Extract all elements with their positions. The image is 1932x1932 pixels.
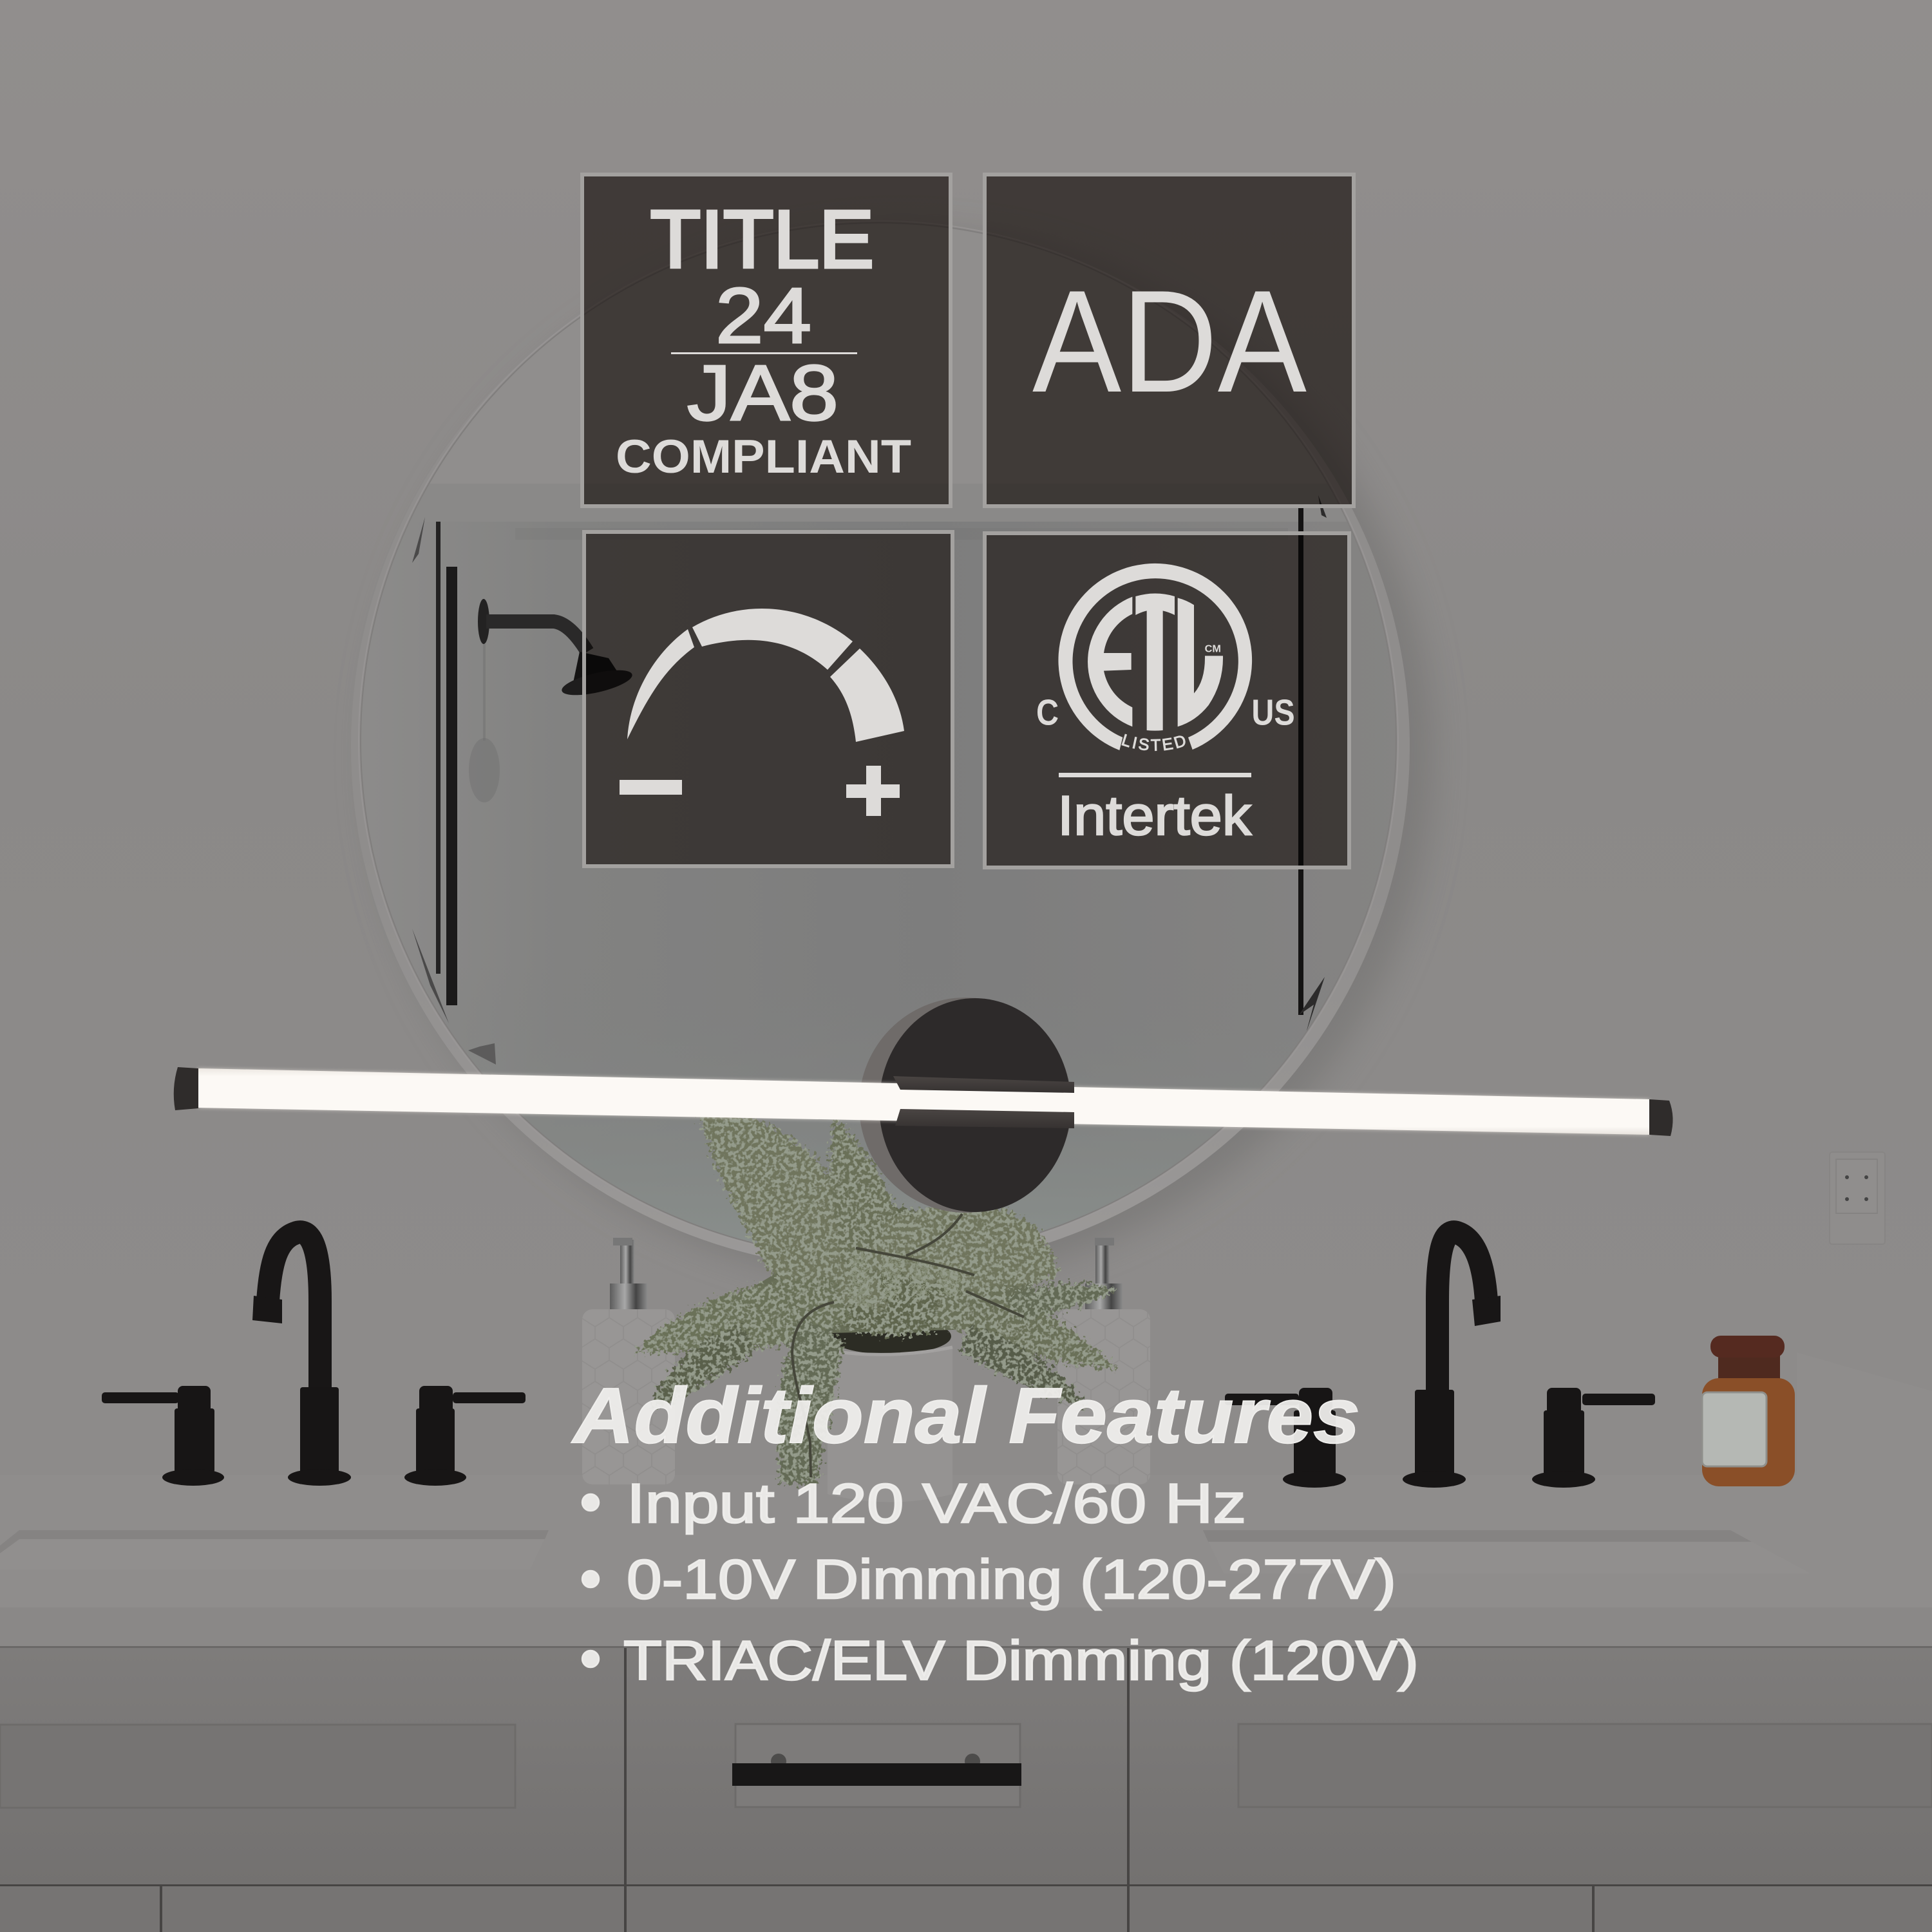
sconce right end cap [1649, 1099, 1673, 1136]
vanity countertop and backsplash [0, 1352, 1932, 1647]
left sink [0, 1530, 549, 1569]
icon: ETL listed mark: LISTED [1121, 734, 1186, 751]
sconce lower clamp [895, 1109, 1074, 1128]
label: Intertek: Intertek [1057, 785, 1252, 847]
label: JA8: JA8 [687, 349, 838, 437]
right sink [1203, 1530, 1810, 1573]
panel: Title 24 JA8 compliant [582, 175, 951, 506]
icon: plus [846, 766, 900, 816]
icon: ETL listed mark [1036, 563, 1295, 751]
amber jar [1702, 1336, 1795, 1486]
right door [1130, 1648, 1932, 1884]
linear wall sconce [174, 998, 1673, 1213]
bullet: TRIAC/ELV dimming: TRIAC/ELV Dimming (120V) [623, 1630, 1419, 1692]
sconce round backplate [859, 998, 1072, 1213]
icon: ETL listed mark: CM [1205, 643, 1221, 654]
left soap dispenser [582, 1238, 675, 1484]
cabinets [0, 1646, 1932, 1932]
right soap dispenser [1057, 1238, 1150, 1484]
icon: ETL listed mark: US [1251, 693, 1295, 734]
icon: minus [620, 780, 682, 795]
bullet: 0-10V dimming: 0-10V Dimming (120-277V) [627, 1549, 1396, 1611]
bottom drawers [0, 1886, 1932, 1932]
bullet: input voltage: Input 120 VAC/60 Hz [627, 1473, 1246, 1535]
icon: dimming gauge [627, 609, 904, 742]
sconce upper clamp [893, 1076, 1074, 1093]
heading: Additional Features: Additional Features [571, 1372, 1360, 1459]
wall outlet [1830, 1152, 1885, 1244]
left faucet [102, 1232, 526, 1486]
sconce left end cap [174, 1067, 198, 1110]
center door [627, 1648, 1127, 1884]
background: bathroom wall [0, 0, 1932, 1352]
label: COMPLIANT: COMPLIANT [616, 431, 911, 483]
left door [0, 1648, 624, 1884]
panel: ETL listed Intertek [983, 531, 1351, 869]
number: 24: 24 [715, 272, 811, 359]
heading: TITLE: TITLE [650, 194, 874, 285]
planter pot [828, 1318, 952, 1502]
sconce glowing tube [198, 1068, 1649, 1135]
right faucet right handle [1532, 1388, 1655, 1488]
fern plant [634, 1112, 1117, 1484]
cabinet handle [732, 1763, 1021, 1786]
left faucet right handle [404, 1386, 526, 1486]
label: ADA: ADA [1032, 260, 1307, 422]
left faucet left handle [102, 1386, 224, 1486]
right faucet left handle [1225, 1388, 1346, 1488]
icon: ETL listed mark: C [1036, 693, 1059, 734]
panel: dimmable [584, 532, 952, 866]
text block: additional features [571, 1372, 1419, 1692]
round mirror [348, 221, 1433, 1282]
panel: ADA [985, 175, 1354, 506]
right faucet [1225, 1232, 1655, 1488]
shower head reflection [478, 599, 634, 700]
